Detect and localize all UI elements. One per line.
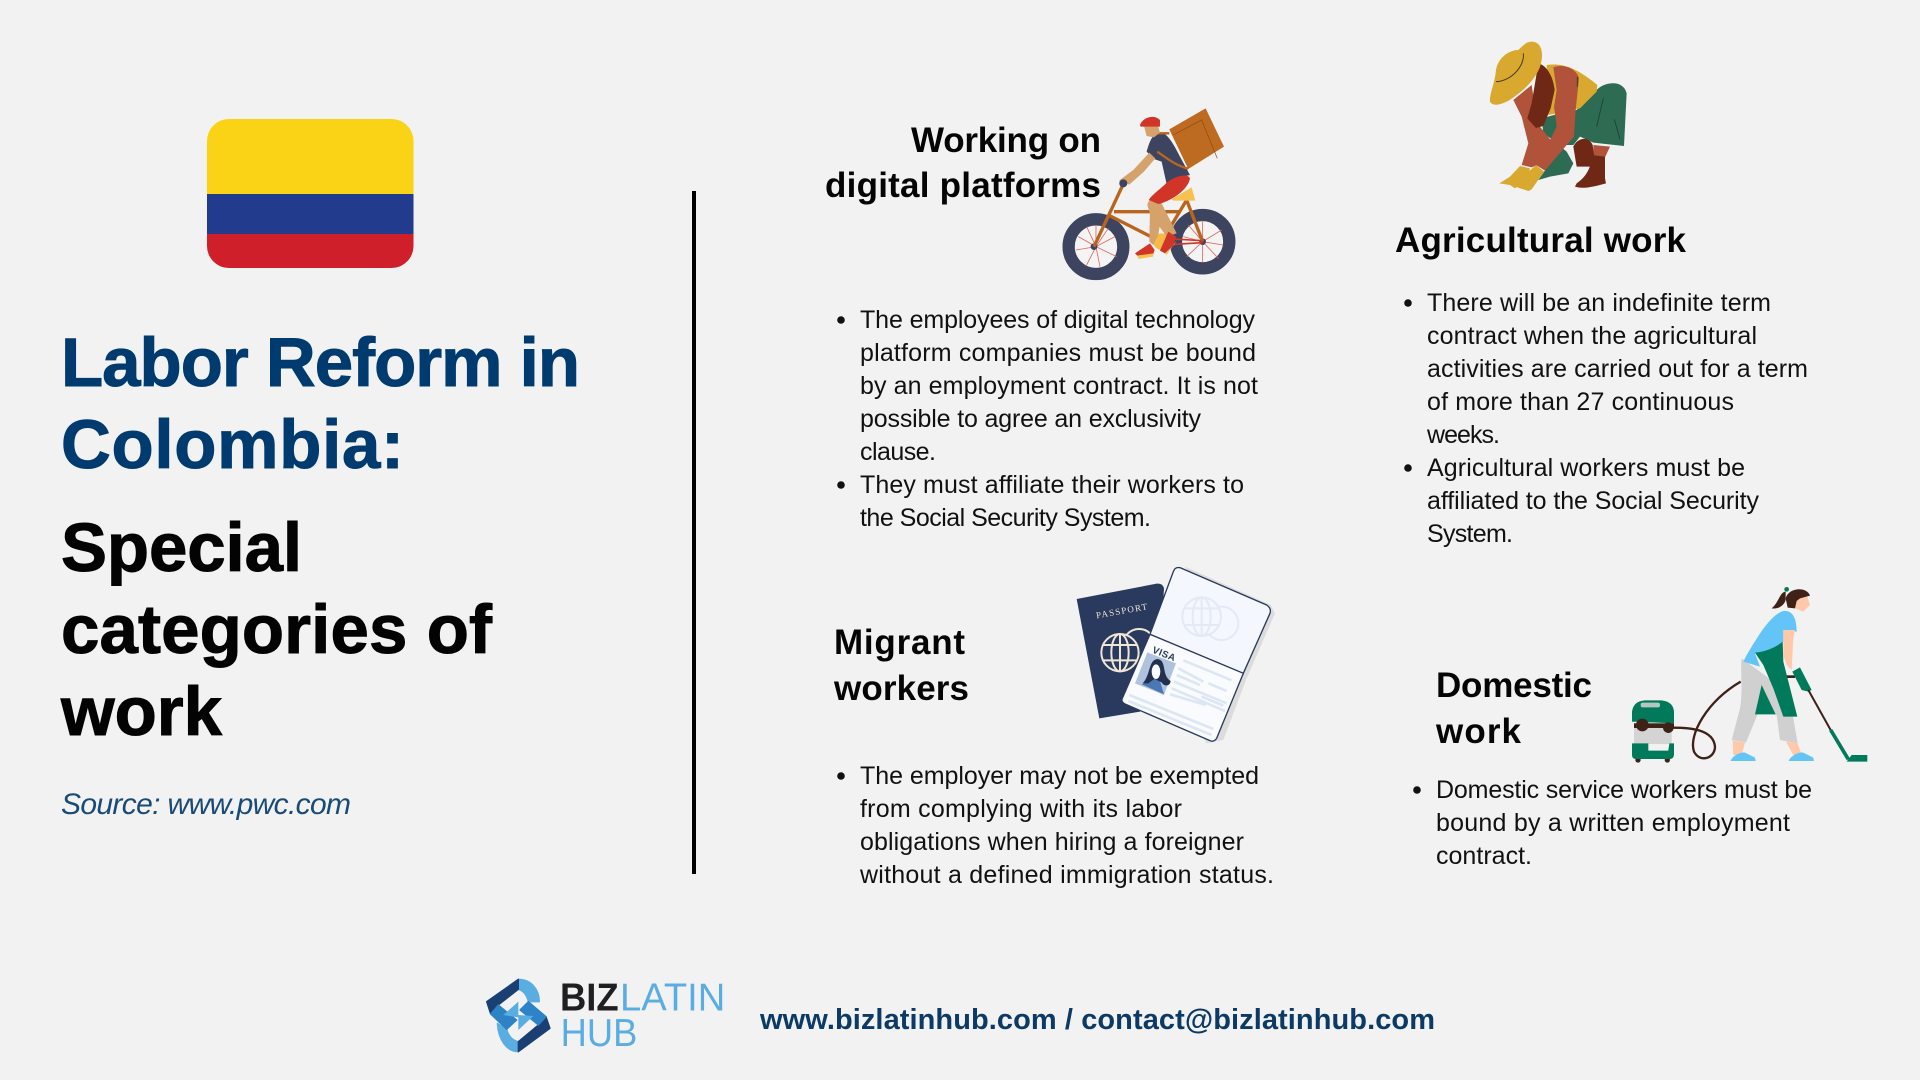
title: Labor Reform in Colombia — [61, 324, 580, 483]
text: agricultural bullets — [1404, 289, 1808, 548]
title: Labor Reform in Colombia: Labor Reform in — [61, 324, 580, 401]
text: digital platforms bullets: by an employment contract. It is not — [860, 372, 1258, 400]
text: migrant bullets: from complying with its labor — [860, 795, 1182, 823]
text: domestic bullets: Domestic service workers must be — [1436, 776, 1812, 804]
logo: Biz Latin Hub: LATIN — [620, 977, 725, 1020]
text: migrant bullets — [837, 762, 1274, 889]
heading: migrant workers: workers — [833, 669, 969, 708]
text: digital platforms bullets: They must affiliate their workers to — [860, 471, 1244, 499]
icon: Colombia flag — [207, 119, 414, 268]
heading: working on digital platforms: digital platforms — [825, 166, 1101, 205]
text: digital platforms bullets: clause. — [860, 438, 936, 466]
text: agricultural bullets: affiliated to the Social Security — [1427, 487, 1760, 515]
text: migrant bullets: without a defined immigration status. — [859, 861, 1274, 889]
text: migrant bullets: The employer may not be exempted — [860, 762, 1259, 790]
text: domestic bullets: bound by a written employment — [1436, 809, 1790, 837]
subtitle: Special categories of work: work — [60, 673, 223, 750]
panel: agricultural work — [1395, 42, 1808, 548]
text: digital platforms bullets — [837, 306, 1258, 532]
subtitle: Special categories of work: categories of — [61, 591, 493, 668]
source note: Source: www.pwc.com — [61, 788, 351, 821]
text: agricultural bullets: weeks. — [1426, 421, 1500, 449]
subtitle: Special categories of work — [60, 509, 493, 750]
text: digital platforms bullets: The employees of digital technology — [860, 306, 1256, 334]
text: digital platforms bullets: possible to agree an exclusivity — [860, 405, 1202, 433]
logo: Biz Latin Hub: BIZ — [560, 977, 619, 1020]
heading: working on digital platforms — [825, 121, 1101, 205]
text: digital platforms bullets: the Social Security System. — [860, 504, 1151, 532]
title: Labor Reform in Colombia: Colombia: — [61, 406, 404, 483]
text: domestic bullets — [1413, 776, 1812, 870]
icon: passport and visa — [1077, 567, 1275, 743]
icon: person vacuuming — [1632, 587, 1867, 763]
text: agricultural bullets: There will be an indefinite term — [1427, 289, 1771, 317]
heading: domestic work — [1435, 666, 1592, 751]
heading: agricultural work: Agricultural work — [1395, 221, 1687, 260]
panel: digital platforms — [825, 108, 1258, 532]
panel: domestic work — [1413, 587, 1867, 870]
icon: passport and visa: VISA — [1151, 645, 1177, 664]
text: agricultural bullets: Agricultural workers must be — [1427, 454, 1745, 482]
heading: domestic work: work — [1435, 712, 1522, 751]
icon: delivery cyclist — [1069, 108, 1229, 274]
text: agricultural bullets: activities are carried out for a term — [1427, 355, 1808, 383]
logo: Biz Latin Hub: HUB — [561, 1012, 637, 1055]
heading: working on digital platforms: Working on — [911, 121, 1101, 160]
text: agricultural bullets: contract when the agricultural — [1427, 322, 1757, 350]
heading: migrant workers — [833, 623, 969, 708]
icon: farm worker — [1490, 42, 1627, 191]
text: digital platforms bullets: platform companies must be bound — [860, 339, 1256, 367]
text: agricultural bullets: of more than 27 continuous — [1427, 388, 1734, 416]
subtitle: Special categories of work: Special — [61, 509, 302, 586]
heading: domestic work: Domestic — [1436, 666, 1592, 705]
text: domestic bullets: contract. — [1436, 842, 1532, 870]
footer contact: www.bizlatinhub.com / contact@bizlatinhub.com — [759, 1004, 1435, 1036]
logo: Biz Latin Hub — [487, 977, 725, 1055]
text: agricultural bullets: System. — [1427, 520, 1513, 548]
panel: migrant workers — [833, 567, 1275, 889]
text: migrant bullets: obligations when hiring a foreigner — [860, 828, 1244, 856]
heading: migrant workers: Migrant — [834, 623, 965, 662]
icon: passport and visa: PASSPORT — [1095, 601, 1148, 620]
